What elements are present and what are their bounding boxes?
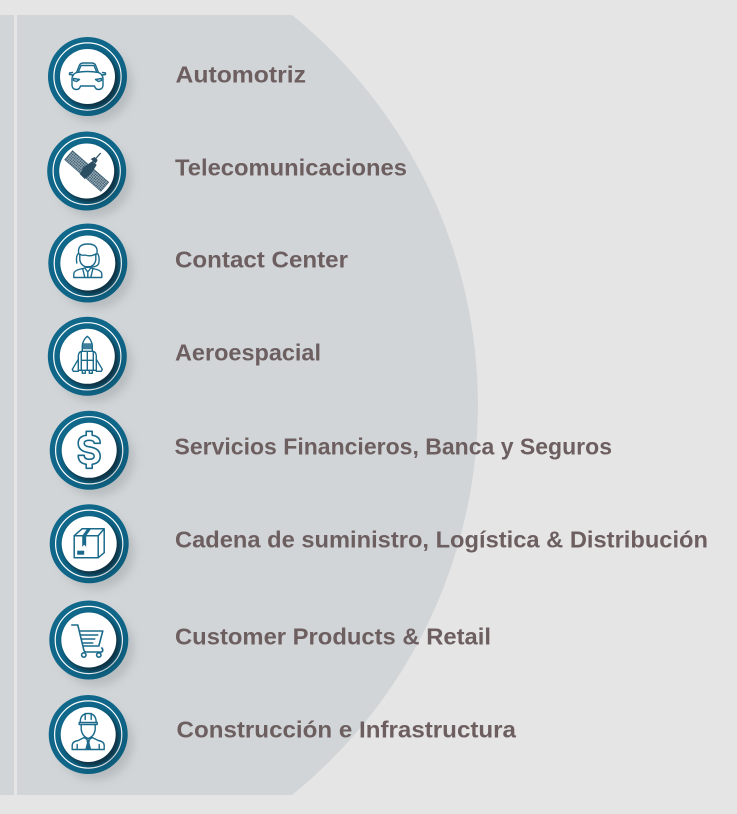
icon: car <box>48 37 132 122</box>
icon: contact center agent <box>48 224 133 309</box>
label: Contact Center: Contact Center <box>175 246 348 272</box>
icon: package box <box>50 504 134 590</box>
icon: shopping cart <box>49 600 134 686</box>
label: Automotriz: Automotriz <box>176 61 306 87</box>
label: Construcción e Infrastructura: Construcción e Infrastructura <box>176 716 517 742</box>
icon: rocket <box>48 317 132 402</box>
label: Servicios Financieros, Banca y Seguros: Servicios Financieros, Banca y Seguros <box>174 433 612 459</box>
icon: satellite <box>47 132 132 217</box>
panel: curved grey backdrop <box>0 15 478 795</box>
label: Telecomunicaciones: Telecomunicaciones <box>175 154 407 180</box>
label: Cadena de suministro, Logística & Distribución: Cadena de suministro, Logística & Distribución <box>175 526 708 552</box>
icon: dollar sign <box>50 411 134 496</box>
icon: construction worker <box>49 695 133 780</box>
label: Customer Products & Retail: Customer Products & Retail <box>175 623 491 649</box>
label: Aeroespacial: Aeroespacial <box>175 339 321 365</box>
